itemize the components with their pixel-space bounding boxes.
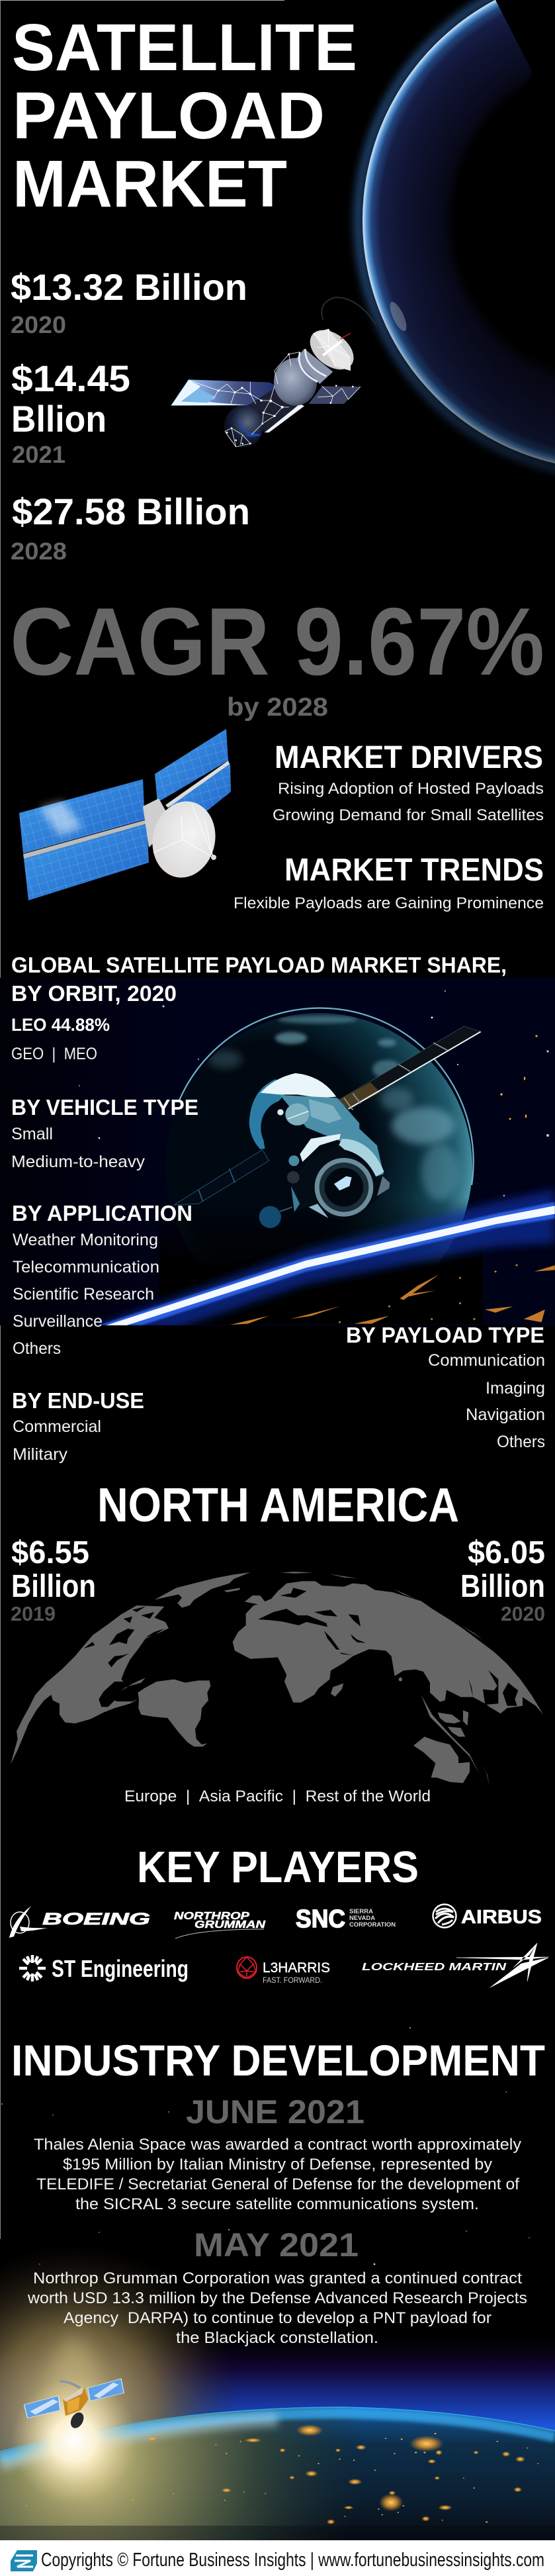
planet in orbit panel [159, 1006, 483, 1324]
stat: 2028 value [11, 491, 250, 565]
logo: Boeing [9, 1906, 150, 1938]
value: 2019: $6.55 [11, 1535, 89, 1570]
stat: 2021 value [11, 358, 130, 468]
stat: 2020 value: 2020 [11, 311, 66, 338]
market trends: MARKET TRENDS [284, 853, 544, 888]
by end-use: Military [13, 1445, 68, 1464]
by application [12, 1201, 192, 1358]
development: June 2021: JUNE 2021 [186, 2093, 364, 2130]
stat: 2028 value: 2028 [11, 538, 67, 565]
logo: Lockheed Martin [362, 1943, 548, 1987]
logo: L3Harris: L3HARRIS [263, 1960, 330, 1976]
logo: Sierra Nevada Corporation: SIERRA [349, 1908, 373, 1915]
value: 2019: 2019 [11, 1602, 56, 1625]
by payload type: Others [497, 1433, 545, 1451]
by vehicle type [11, 1095, 198, 1171]
world map [11, 1572, 544, 1786]
market share heading by orbit: BY ORBIT, 2020 [11, 981, 177, 1006]
north america heading: NORTH AMERICA [97, 1479, 459, 1532]
key players heading: KEY PLAYERS [137, 1842, 419, 1892]
title [12, 11, 357, 221]
other regions: Europe | Asia Pacific | Rest of the World [124, 1788, 431, 1805]
by application: Scientific Research [13, 1285, 154, 1304]
by vehicle type: Small [11, 1125, 53, 1143]
development: June 2021: $195 Million by Italian Ministry of Defense, represented by [63, 2156, 493, 2173]
logo: Northrop Grumman [174, 1911, 266, 1938]
market trends [234, 853, 544, 912]
by payload type [346, 1323, 545, 1451]
by application: Weather Monitoring [13, 1231, 158, 1249]
by application: Others [13, 1339, 61, 1358]
value: 2019 [11, 1535, 96, 1625]
logo: L3Harris: FAST. FORWARD. [263, 1977, 322, 1985]
by end-use: Commercial [13, 1417, 101, 1436]
market share heading by orbit: GLOBAL SATELLITE PAYLOAD MARKET SHARE, [11, 953, 507, 977]
development: May 2021 [27, 2226, 527, 2347]
value: 2020 [460, 1535, 545, 1625]
title: PAYLOAD [13, 79, 325, 153]
development: June 2021: TELEDIFE / Secretariat General of Defense for the development of [36, 2175, 519, 2193]
stat: 2021 value: $14.45 [11, 358, 130, 399]
stat: 2020 value [11, 266, 247, 338]
by payload type: Communication [428, 1351, 545, 1370]
market drivers: MARKET DRIVERS [275, 740, 543, 775]
stat: 2021 value: Bllion [11, 398, 107, 440]
logo: Sierra Nevada Corporation: CORPORATION [349, 1921, 396, 1929]
logo: Sierra Nevada Corporation: SNC [296, 1905, 345, 1933]
by application: BY APPLICATION [12, 1201, 192, 1225]
stat: 2020 value: $13.32 Billion [11, 266, 247, 308]
development: June 2021: Thales Alenia Space was awarded a contract worth approximately [34, 2136, 522, 2154]
logo: ST Engineering: ST Engineering [52, 1955, 189, 1982]
panel: starfield and earth [0, 2027, 555, 2540]
title: SATELLITE [12, 11, 357, 85]
CAGR year: by 2028 [227, 693, 328, 722]
icon: small satellite over earth [24, 2379, 124, 2429]
by vehicle type: Medium-to-heavy [11, 1153, 146, 1171]
footer: copyright bar [0, 2540, 555, 2576]
planet arc background [349, 0, 555, 476]
development: May 2021: Northrop Grumman Corporation was granted a continued contract [33, 2269, 522, 2287]
development: May 2021: Agency DARPA) to continue to develop a PNT payload for [64, 2309, 491, 2327]
logo: Airbus [433, 1904, 542, 1928]
market share heading by orbit [11, 953, 507, 1006]
market drivers: Rising Adoption of Hosted Payloads [278, 780, 544, 798]
value: 2020: Billion [460, 1569, 545, 1604]
value: 2020: 2020 [501, 1602, 545, 1625]
logo: L3Harris [237, 1957, 330, 1985]
logo: Sierra Nevada Corporation [296, 1905, 396, 1933]
by vehicle type: BY VEHICLE TYPE [11, 1095, 198, 1120]
logo: Airbus: AIRBUS [461, 1907, 542, 1928]
logo: ST Engineering [19, 1955, 189, 1982]
value: 2019: Billion [11, 1569, 96, 1604]
logo: Lockheed Martin: LOCKHEED MARTIN [362, 1962, 507, 1973]
orbit values: LEO 44.88% [11, 1015, 110, 1035]
market trends: Flexible Payloads are Gaining Prominence [234, 894, 544, 912]
logo: Northrop Grumman: GRUMMAN [194, 1919, 266, 1931]
orbit values [11, 1015, 110, 1063]
logo: Boeing: BOEING [42, 1910, 150, 1929]
development: May 2021: worth USD 13.3 million by the Defense Advanced Research Projects [27, 2289, 527, 2307]
stat: 2028 value: $27.58 Billion [12, 491, 250, 532]
by end-use: BY END-USE [12, 1388, 144, 1413]
icon: low-poly satellite [171, 297, 376, 448]
market drivers [273, 740, 544, 824]
development: June 2021: the SICRAL 3 secure satellite communications system. [75, 2195, 479, 2213]
title: MARKET [13, 147, 287, 221]
light streak and city lights [89, 1189, 555, 1329]
by payload type: Navigation [466, 1406, 545, 1424]
logo: Sierra Nevada Corporation: NEVADA [349, 1915, 375, 1922]
icon: space station [174, 1026, 481, 1228]
market drivers: Growing Demand for Small Satellites [273, 806, 544, 824]
logo: Northrop Grumman: NORTHROP [174, 1911, 249, 1922]
icon: satellite with solar panels and dish [19, 729, 231, 900]
by application: Surveillance [13, 1312, 103, 1331]
stat: 2021 value: 2021 [12, 441, 65, 468]
orbit values: GEO | MEO [11, 1045, 97, 1063]
development: May 2021: MAY 2021 [194, 2226, 359, 2264]
by end-use [12, 1388, 144, 1464]
by payload type: Imaging [486, 1379, 545, 1398]
by payload type: BY PAYLOAD TYPE [346, 1323, 544, 1347]
by application: Telecommunication [13, 1258, 159, 1276]
development: May 2021: the Blackjack constellation. [176, 2329, 378, 2347]
value: 2020: $6.05 [468, 1535, 545, 1570]
panel: orbit background image [0, 978, 555, 1325]
development: June 2021 [34, 2093, 522, 2213]
